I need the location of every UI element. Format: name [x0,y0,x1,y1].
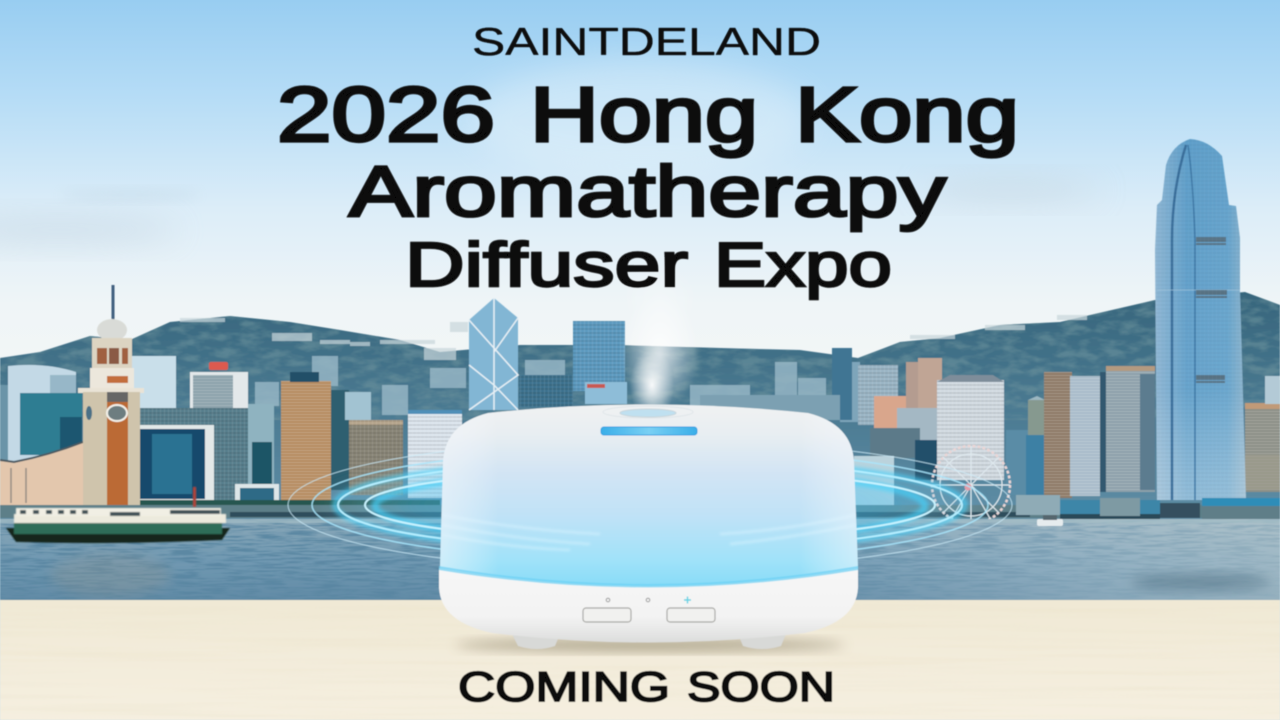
title line 2: Aromatherapy [349,153,947,232]
coming soon: SOON [687,663,835,710]
title line 1: Hong [530,72,758,158]
button left [583,608,631,622]
button icons [606,596,691,604]
light strip [601,427,697,435]
wooden table [0,600,1280,720]
frosted body [440,404,858,586]
right city buildings [937,366,1280,498]
vapor rings [288,440,1012,570]
title line 3 [405,231,892,300]
mountains [0,290,1280,520]
sky background [0,0,1280,380]
glow band [439,566,858,588]
title line 3: Expo [714,231,892,300]
clock tower [78,285,144,508]
ferris wheel [932,446,1010,524]
coming soon: COMING [458,663,670,710]
left city buildings [0,356,440,516]
shadow [455,639,845,651]
base [439,568,858,642]
coming soon [458,663,835,710]
title line 3: Diffuser [405,231,688,300]
harbour water [0,519,1280,600]
convention centre roof [0,442,83,507]
bank tower [469,298,518,410]
tall tower [1155,139,1247,500]
title line 1: Kong [795,72,1019,158]
brand name: SAINTDELAND [472,21,821,64]
button right [667,608,715,622]
body light streaks [442,515,856,550]
central high-rises [408,298,942,506]
top ring [603,406,693,418]
ferry [6,487,230,543]
title line 1: 2026 [277,72,495,158]
diffuser [288,262,1012,651]
title line 1 [277,72,1019,158]
feet [512,634,560,649]
mist plume [618,262,702,421]
small boat [1037,515,1063,526]
waterfront piers [0,490,1280,521]
